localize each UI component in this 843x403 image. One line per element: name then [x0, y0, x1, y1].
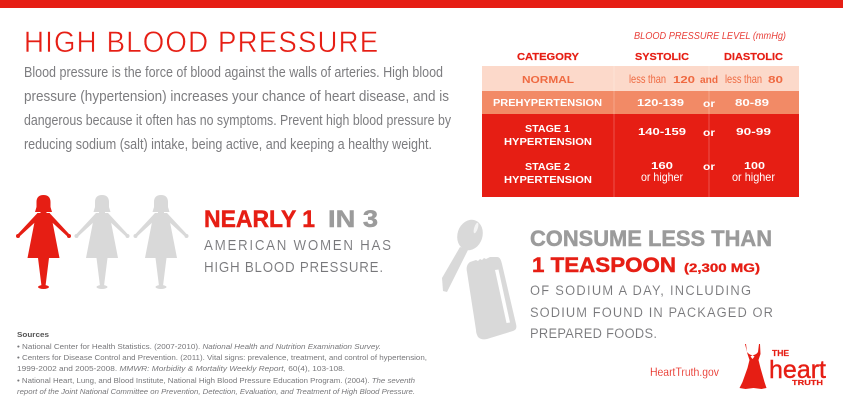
table column headers: DIASTOLIC	[724, 51, 783, 63]
intro paragraph	[24, 64, 451, 153]
row: normal: 120	[673, 74, 695, 86]
sources: 1999-2002 and 2005-2008. MMWR: Morbidity & Mortality Weekly Report, 60(4), 103-108.	[17, 364, 345, 373]
row group: stage 1 and stage 2 hypertension: HYPERTENSION	[504, 136, 592, 148]
icon: salt shaker	[467, 257, 516, 339]
row group: stage 1 and stage 2 hypertension: STAGE 2	[525, 161, 570, 173]
row group: stage 1 and stage 2 hypertension: 140-159	[638, 126, 686, 138]
row group: stage 1 and stage 2 hypertension: or	[703, 127, 715, 139]
intro paragraph: Blood pressure is the force of blood against the walls of arteries. High blood	[24, 64, 443, 81]
row group: stage 1 and stage 2 hypertension: or higher	[641, 170, 683, 184]
row: prehypertension: or	[703, 98, 715, 110]
table column headers: CATEGORY	[517, 51, 579, 63]
statistic: nearly 1 in 3	[204, 206, 391, 275]
icon: red dress	[740, 344, 766, 389]
icon: three women	[16, 195, 188, 289]
row group: stage 1 and stage 2 hypertension: 90-99	[736, 126, 771, 138]
table column headers: SYSTOLIC	[635, 51, 689, 63]
sources: report of the Joint National Committee on Prevention, Detection, Evaluation, and Treatment of High Blood Pressure.	[17, 387, 415, 396]
row: prehypertension: PREHYPERTENSION	[493, 97, 602, 109]
row: prehypertension	[482, 91, 799, 114]
sources	[17, 330, 427, 396]
table heading: blood pressure level: BLOOD PRESSURE LEVEL (mmHg)	[634, 31, 786, 42]
logo wordmark: TRUTH	[792, 378, 823, 387]
statistic: consume less than 1 teaspoon: (2,300 MG)	[684, 263, 760, 275]
blood pressure table	[482, 31, 799, 197]
row group: stage 1 and stage 2 hypertension: or	[703, 161, 715, 173]
row: prehypertension: 80-89	[735, 97, 769, 109]
intro paragraph: dangerous because it often has no symptoms. Prevent high blood pressure by	[24, 112, 451, 129]
sources: • National Heart, Lung, and Blood Institute, National High Blood Pressure Education Program. (2004). The seventh	[17, 376, 415, 385]
icon: woman gray 1	[74, 195, 130, 289]
statistic: consume less than 1 teaspoon: SODIUM FOUND IN PACKAGED OR	[530, 305, 773, 320]
intro paragraph: reducing sodium (salt) intake, being active, and keeping a healthy weight.	[24, 136, 432, 153]
row group: stage 1 and stage 2 hypertension: or higher	[732, 170, 775, 184]
row: normal: NORMAL	[522, 74, 575, 86]
table column headers	[517, 51, 783, 63]
statistic: nearly 1 in 3: IN 3	[328, 206, 378, 233]
website link: HeartTruth.gov	[650, 365, 719, 379]
intro paragraph: pressure (hypertension) increases your chance of heart disease, and is	[24, 88, 449, 105]
statistic: consume less than 1 teaspoon: 1 TEASPOON	[532, 253, 676, 277]
sources: Sources	[17, 330, 49, 339]
row: normal: less than	[725, 72, 762, 86]
title: HIGH BLOOD PRESSURE	[24, 26, 378, 59]
row group: stage 1 and stage 2 hypertension: STAGE 1	[525, 123, 570, 135]
logo: the heart truth	[740, 344, 826, 389]
sources: • Centers for Disease Control and Prevention. (2011). Vital signs: prevalence, treatment, and control of hypertension,	[17, 353, 427, 362]
statistic: nearly 1 in 3: AMERICAN WOMEN HAS	[204, 236, 391, 253]
row group: stage 1 and stage 2 hypertension: HYPERTENSION	[504, 174, 592, 186]
statistic: consume less than 1 teaspoon: PREPARED FOODS.	[530, 326, 657, 341]
icon: woman gray 2	[134, 195, 188, 289]
statistic: consume less than 1 teaspoon: OF SODIUM A DAY, INCLUDING	[530, 283, 751, 298]
statistic: nearly 1 in 3: NEARLY 1	[204, 206, 315, 233]
logo wordmark: THE	[772, 349, 790, 358]
icon: woman red	[16, 195, 71, 289]
row group: stage 1 and stage 2 hypertension: 100	[744, 160, 765, 172]
row: normal: and	[700, 75, 718, 86]
row group: stage 1 and stage 2 hypertension: 160	[651, 160, 673, 172]
statistic: nearly 1 in 3: HIGH BLOOD PRESSURE.	[204, 258, 383, 275]
statistic: consume less than 1 teaspoon: CONSUME LESS THAN	[530, 226, 772, 251]
row: normal: 80	[768, 74, 783, 86]
logo wordmark: heart	[769, 356, 826, 384]
row: prehypertension: 120-139	[637, 97, 684, 109]
sources: • National Center for Health Statistics. (2007-2010). National Health and Nutrition Examination Survey.	[17, 342, 381, 351]
row group: stage 1 and stage 2 hypertension	[482, 114, 799, 197]
row: normal	[482, 66, 799, 91]
top banner bar	[0, 0, 843, 8]
row: normal: less than	[629, 72, 666, 86]
statistic: consume less than 1 teaspoon	[530, 226, 773, 341]
icon: spoon	[442, 216, 487, 292]
